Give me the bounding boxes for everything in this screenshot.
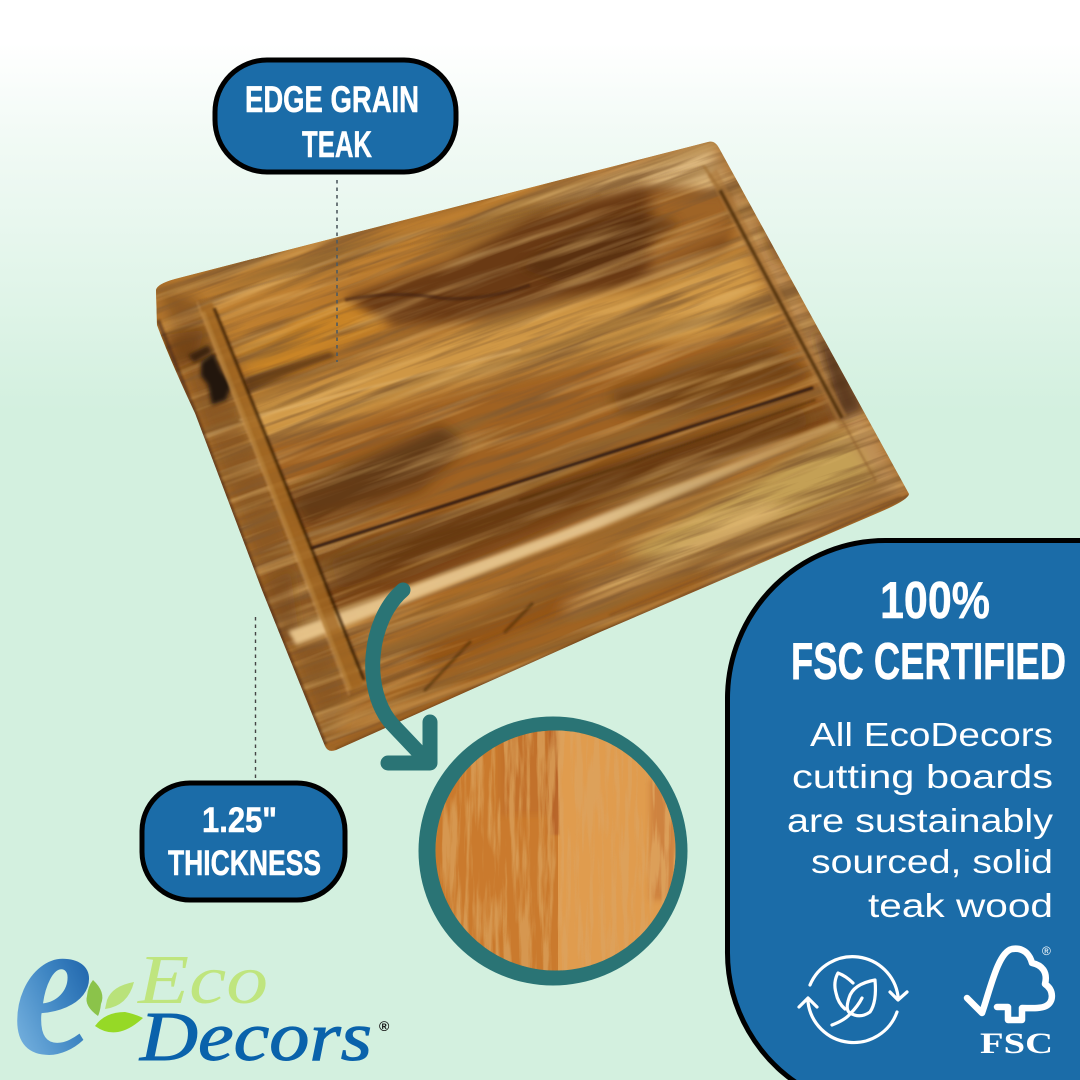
callout line: edge grain bbox=[336, 180, 338, 362]
arrow to close-up bbox=[373, 590, 430, 763]
logo: EcoDecors: ® bbox=[379, 1018, 390, 1034]
panel body text: sourced, solid bbox=[811, 843, 1053, 880]
panel: FSC certified bbox=[727, 540, 1080, 1080]
dark streak patches bbox=[285, 345, 815, 590]
panel body text bbox=[787, 716, 1054, 924]
label: edge grain teak bbox=[215, 60, 456, 172]
cutting board photo bbox=[156, 142, 909, 751]
label: thickness: THICKNESS bbox=[168, 844, 321, 883]
label: thickness: 1.25" bbox=[202, 801, 277, 840]
logo: EcoDecors bbox=[13, 876, 390, 1080]
label: edge grain teak: TEAK bbox=[302, 124, 372, 165]
pale highlight strip bbox=[288, 421, 840, 645]
dark rim strips bbox=[165, 225, 865, 650]
panel body text: All EcoDecors bbox=[810, 716, 1053, 753]
logo: EcoDecors: Decors bbox=[139, 999, 372, 1076]
label: edge grain teak: EDGE GRAIN bbox=[245, 79, 419, 120]
icon: recycling leaf bbox=[799, 957, 907, 1043]
logo: EcoDecors: Eco bbox=[137, 942, 268, 1019]
panel body text: teak wood bbox=[868, 887, 1053, 924]
panel heading: 100% bbox=[880, 572, 990, 630]
fine grain bbox=[156, 142, 909, 742]
broad grain bbox=[170, 142, 902, 715]
callout line: thickness bbox=[254, 617, 256, 780]
panel body text: are sustainably bbox=[787, 802, 1054, 839]
panel heading bbox=[791, 572, 1066, 691]
knot on left rim bbox=[188, 345, 335, 405]
label: thickness bbox=[142, 783, 345, 900]
icon: FSC logo: ® bbox=[1042, 944, 1051, 958]
juice groove bbox=[158, 166, 909, 750]
icon: FSC logo bbox=[967, 944, 1053, 1060]
panel body text: cutting boards bbox=[792, 758, 1053, 795]
grain close-up circle bbox=[418, 716, 688, 986]
dark knot bbox=[344, 180, 736, 330]
icon: FSC logo: FSC bbox=[980, 1027, 1053, 1060]
